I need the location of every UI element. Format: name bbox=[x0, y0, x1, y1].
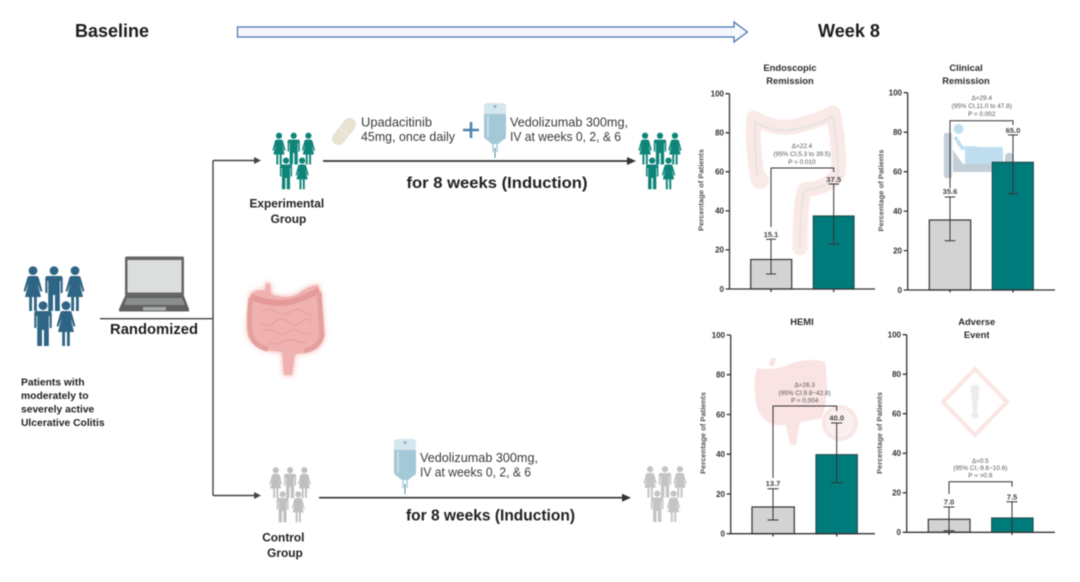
bars bbox=[928, 518, 1033, 532]
axes and ticks: 20 bbox=[716, 490, 726, 499]
axes and ticks: 100 bbox=[888, 330, 902, 340]
text: statistics: Δ=22.4 bbox=[792, 143, 813, 150]
text: Randomized: Randomized bbox=[110, 322, 198, 338]
text: y-axis label: Percentage of Patients bbox=[696, 149, 706, 231]
text: statistics: Δ=0.5 bbox=[972, 458, 989, 465]
text: Control Group label: Control bbox=[262, 530, 304, 544]
axes and ticks: 20 bbox=[715, 246, 725, 254]
icon: control group people bbox=[269, 467, 311, 522]
heading: Week 8: Week 8 bbox=[818, 21, 880, 41]
text: bar values: 35.6 bbox=[943, 187, 957, 196]
text: bar values: 7.5 bbox=[1007, 492, 1018, 502]
text: statistics: (95% CI,5.3 to 39.5) bbox=[773, 151, 831, 158]
icon: plus sign bbox=[463, 122, 479, 138]
icon: experimental group people bbox=[272, 133, 315, 189]
icon: patient in bed watermark bbox=[944, 124, 1013, 178]
text: bar values bbox=[766, 414, 844, 488]
text: statistics: P = 0.004 bbox=[791, 398, 819, 404]
text: bar values: 13.7 bbox=[766, 479, 780, 488]
icon: IV bag experimental arm bbox=[484, 103, 506, 158]
heading: Baseline: Baseline bbox=[75, 21, 149, 41]
text: bar values: 7.0 bbox=[944, 498, 954, 506]
text: patient description: Patients with bbox=[21, 378, 85, 388]
panel: Endoscopic Remission chart bbox=[696, 62, 875, 294]
text: bar values bbox=[943, 126, 1020, 196]
text: y-axis label: Percentage of Patients bbox=[876, 150, 886, 231]
text: statistics: Δ=26.3 bbox=[794, 382, 815, 389]
bars bbox=[752, 455, 857, 534]
axes and ticks: 0 bbox=[898, 286, 903, 295]
axes and ticks: 20 bbox=[892, 489, 902, 498]
heading: Endoscopic Remission: Endoscopic bbox=[763, 62, 817, 73]
bars bbox=[929, 162, 1033, 290]
axes and ticks: 80 bbox=[716, 370, 726, 380]
icon: pill bbox=[330, 116, 358, 147]
icon: pale intestine with magnifier watermark bbox=[754, 358, 856, 445]
text: y-axis label: Percentage of Patients bbox=[698, 392, 708, 474]
text: Vedolizumab dose experimental arm: Vedolizumab 300mg, bbox=[510, 116, 628, 130]
text: bar values bbox=[764, 175, 842, 239]
icon: experimental group outcome people bbox=[638, 133, 682, 189]
axes and ticks: 40 bbox=[715, 206, 725, 216]
text: y-axis label: Percentage of Patients bbox=[875, 392, 884, 474]
text: bar values: 37.5 bbox=[826, 175, 842, 184]
axes and ticks: 80 bbox=[893, 128, 903, 137]
icon: patient population bbox=[24, 266, 84, 346]
axes and ticks: 0 bbox=[721, 530, 726, 538]
text: bar values: 15.1 bbox=[764, 230, 779, 239]
text: experimental duration: for 8 weeks (Induction) bbox=[406, 175, 588, 192]
text: Vedolizumab dose control arm: Vedolizumab 300mg, bbox=[420, 451, 538, 465]
axes and ticks bbox=[712, 331, 875, 538]
axes and ticks: 80 bbox=[892, 370, 902, 379]
axes and ticks bbox=[888, 330, 1055, 537]
axes and ticks bbox=[711, 90, 875, 294]
text: statistics: (95% CI,11.0 to 47.8) bbox=[952, 103, 1012, 110]
axes and ticks: 40 bbox=[893, 207, 903, 216]
axes and ticks: 100 bbox=[889, 88, 903, 98]
error bars and significance bracket bbox=[944, 482, 1018, 534]
axes and ticks bbox=[889, 88, 1055, 295]
axes and ticks: 40 bbox=[892, 449, 902, 458]
text: Experimental Group label: Group bbox=[271, 212, 306, 226]
text: patient description: severely active bbox=[21, 404, 95, 416]
text: Upadacitinib dose: Upadacitinib bbox=[361, 116, 432, 130]
icon: control group outcome people bbox=[643, 466, 687, 522]
text: statistics: (95% CI,-9.6−10.6) bbox=[953, 465, 1007, 472]
error bars and significance bracket bbox=[768, 406, 842, 520]
icon: warning diamond watermark bbox=[943, 369, 1007, 435]
panel: Adverse Event chart bbox=[875, 316, 1055, 537]
icon: laptop bbox=[119, 256, 189, 312]
icon: pale colon watermark bbox=[751, 113, 838, 248]
heading: Adverse Event: Adverse bbox=[958, 316, 995, 327]
axes and ticks: 80 bbox=[715, 128, 725, 138]
text: control duration: for 8 weeks (Induction) bbox=[406, 508, 575, 524]
heading: HEMI: HEMI bbox=[790, 316, 814, 327]
text: bar values: 40.0 bbox=[829, 414, 844, 422]
panel: Clinical Remission chart bbox=[876, 62, 1055, 295]
arrow: timeline from baseline to week 8 bbox=[238, 22, 748, 42]
axes and ticks: 40 bbox=[716, 450, 726, 459]
text: statistics: Δ=29.4 bbox=[971, 95, 992, 102]
text: patient description: moderately to bbox=[21, 391, 89, 402]
arrow: control treatment bbox=[319, 494, 631, 502]
text: bar values bbox=[944, 492, 1018, 506]
axes and ticks: 60 bbox=[716, 410, 726, 419]
text: statistics: P = >0.9 bbox=[968, 472, 993, 480]
axes and ticks: 100 bbox=[712, 331, 726, 340]
bars bbox=[751, 216, 854, 289]
text: Vedolizumab dose experimental arm: IV at weeks 0, 2, & 6 bbox=[510, 130, 621, 144]
heading: Adverse Event: Event bbox=[964, 329, 989, 340]
axes and ticks: 0 bbox=[720, 285, 725, 294]
text: bar values: 65.0 bbox=[1006, 126, 1020, 135]
text: statistics: (95% CI,9.8−42.8) bbox=[779, 390, 831, 397]
text: patient description: Ulcerative Colitis bbox=[21, 418, 105, 429]
axes and ticks: 60 bbox=[892, 410, 902, 418]
error bars and significance bracket bbox=[766, 168, 839, 274]
error bars and significance bracket bbox=[945, 121, 1018, 241]
text: statistics: P = 0.002 bbox=[968, 111, 996, 118]
panel: HEMI chart bbox=[698, 316, 875, 538]
text: Vedolizumab dose control arm: IV at weeks 0, 2, & 6 bbox=[420, 466, 531, 480]
icon: IV bag control arm bbox=[394, 439, 416, 494]
text: statistics: P = 0.010 bbox=[788, 159, 816, 166]
axes and ticks: 0 bbox=[897, 528, 902, 537]
icon: intestine illustration bbox=[247, 283, 324, 375]
text: Upadacitinib dose: 45mg, once daily bbox=[361, 130, 456, 144]
arrow: randomization split bbox=[100, 157, 261, 499]
heading: Endoscopic Remission: Remission bbox=[766, 75, 814, 86]
axes and ticks: 60 bbox=[893, 168, 903, 176]
heading: Clinical Remission: Remission bbox=[942, 75, 990, 86]
axes and ticks: 20 bbox=[893, 246, 903, 256]
axes and ticks: 100 bbox=[711, 90, 725, 98]
arrow: experimental treatment bbox=[323, 157, 636, 165]
heading: Clinical Remission: Clinical bbox=[949, 62, 983, 73]
text: Control Group label: Group bbox=[267, 546, 303, 560]
text: Experimental Group label: Experimental bbox=[250, 196, 324, 210]
axes and ticks: 60 bbox=[715, 168, 725, 176]
